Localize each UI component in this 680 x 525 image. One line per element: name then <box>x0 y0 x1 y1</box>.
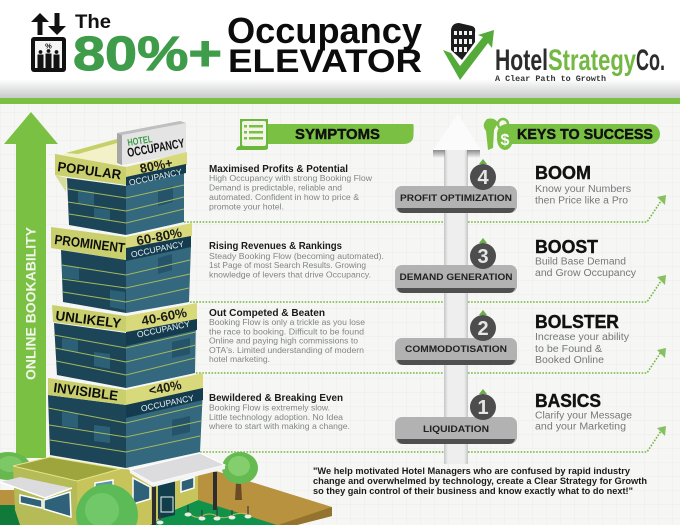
key: basics <box>535 391 632 432</box>
title <box>73 10 422 81</box>
arrow: online bookability: ONLINE BOOKABILITY <box>22 226 38 380</box>
key: boom <box>535 163 631 206</box>
key: basics: BASICS <box>535 391 601 411</box>
symptom: bewildered: Booking Flow is extremely slow. <box>209 402 330 412</box>
symptom: maximised profits: promote your hotel. <box>209 202 284 212</box>
icon: keys <box>484 118 513 150</box>
tree: right <box>222 452 258 500</box>
key: boom: BOOM <box>535 163 591 183</box>
symptom: out competed: Online and paying high commissions to <box>209 336 358 346</box>
step 2: commodotisation: 2 <box>477 318 489 340</box>
rooftop <box>60 139 126 168</box>
quote: "We help motivated Hotel Managers who are confused by rapid industry <box>313 466 630 476</box>
icon: scroll list <box>236 119 268 150</box>
floor section: prominent: 60-80% <box>135 225 184 248</box>
step 2: commodotisation: COMMODOTISATION <box>405 344 507 355</box>
logo: Hotel Strategy Co: A Clear Path to Growth <box>495 75 606 84</box>
symptom: out competed: hotel marketing. <box>209 354 270 364</box>
step 1: liquidation: 1 <box>477 397 489 419</box>
symptom: rising revenues <box>209 241 384 280</box>
symptom: bewildered: Bewildered & Breaking Even <box>209 393 343 404</box>
floor section: prominent <box>51 223 192 313</box>
key: bolster <box>535 312 629 366</box>
title: ELEVATOR <box>228 43 422 79</box>
symptom: bewildered: Little technology adoption. No Idea <box>209 412 343 422</box>
step 2: commodotisation <box>395 310 517 365</box>
symptom: out competed: OTA's. Limited understanding of modern <box>209 345 364 355</box>
symptom: rising revenues: 1st Page of most Search Results. Growing <box>209 260 366 270</box>
key: boost <box>535 237 636 279</box>
entrance with door and windows <box>130 453 225 525</box>
building tower <box>48 121 203 468</box>
title: The <box>75 11 111 33</box>
floor section: invisible: OCCUPANCY <box>140 392 195 414</box>
sign: hotel occupancy: HOTEL <box>127 134 153 149</box>
header: symptoms: SYMPTOMS <box>295 127 380 143</box>
step 4: profit optimization <box>395 159 517 213</box>
symptom: bewildered: where to start with making a change. <box>208 421 350 431</box>
step 3: demand generation: 3 <box>477 246 489 268</box>
quote: so they gain control of their business and know exactly what to do next!" <box>313 486 633 496</box>
logo: Hotel Strategy Co <box>443 23 665 84</box>
step 3: demand generation: DEMAND GENERATION <box>400 272 513 283</box>
floor section: invisible <box>48 373 203 468</box>
step 4: profit optimization: PROFIT OPTIMIZATION <box>400 193 512 204</box>
floor section: unlikely: UNLIKELY <box>55 308 122 331</box>
symptom: rising revenues: Steady Booking Flow (becoming automated). <box>209 251 384 261</box>
stanchions and rope <box>156 505 252 524</box>
key: basics: and your Marketing <box>535 422 626 432</box>
logo: Hotel Strategy Co: Strategy <box>548 44 636 77</box>
low-rise lobby building <box>0 453 252 525</box>
symptom: maximised profits: High Occupancy with strong Booking Flow <box>209 173 373 183</box>
left awning and windows <box>0 477 72 517</box>
floor section: prominent: PROMINENT <box>54 232 127 256</box>
symptom: out competed: Out Competed & Beaten <box>209 308 325 319</box>
sign: hotel occupancy <box>117 121 186 165</box>
floor section: unlikely: 40-60% <box>140 305 189 328</box>
header: symptoms <box>236 119 414 150</box>
floor section: popular: OCCUPANCY <box>128 166 183 188</box>
ground: dirt and lawn <box>0 471 332 525</box>
key: boost: and Grow Occupancy <box>535 268 636 279</box>
floor section: popular <box>55 152 187 235</box>
symptom: rising revenues: Rising Revenues & Rankings <box>209 241 342 252</box>
sign: hotel occupancy: OCCUPANCY <box>126 136 186 160</box>
symptom: out competed <box>209 308 365 364</box>
key: boom: then Price like a Pro <box>535 196 628 206</box>
floor section: prominent: OCCUPANCY <box>130 238 185 260</box>
key: boost: Build Base Demand <box>535 256 626 268</box>
step 1: liquidation <box>395 389 517 444</box>
symptom: out competed: Booking Flow is only a trickle as you lose <box>209 317 365 327</box>
symptom: bewildered <box>208 393 350 431</box>
key: basics: Clarify your Message <box>535 410 632 422</box>
quote <box>313 466 647 496</box>
header band <box>0 0 680 104</box>
floor section: invisible: <40% <box>148 377 183 398</box>
key: boom: Know your Numbers <box>535 184 631 195</box>
quote: change and overwhelmed by technology, create a Clear Strategy for Growth <box>313 476 647 486</box>
icon: keys: $ <box>501 132 510 149</box>
tree: left <box>0 452 30 480</box>
arrow: central elevator shaft <box>433 114 481 464</box>
logo: Hotel Strategy Co: Hotel <box>495 44 548 77</box>
floor section: popular: POPULAR <box>57 159 122 182</box>
symptom: rising revenues: knowledge of levers that drive Occupancy. <box>209 270 371 280</box>
step 3: demand generation <box>395 238 517 293</box>
symptom: maximised profits: automated. Confident in how to price & <box>209 192 359 202</box>
floor section: unlikely <box>52 303 197 388</box>
back window <box>95 480 113 488</box>
symptom: maximised profits: Maximised Profits & Potential <box>209 164 348 175</box>
icon: elevator with people <box>31 13 66 72</box>
step 1: liquidation: LIQUIDATION <box>423 424 489 435</box>
floor section: invisible: INVISIBLE <box>53 380 119 403</box>
title: 80%+ <box>73 28 222 81</box>
key: bolster: Booked Online <box>535 355 604 366</box>
arrow: online bookability <box>4 112 58 458</box>
floor section: popular: 80%+ <box>139 155 174 176</box>
symptom: out competed: the race to booking. Difficult to be found <box>209 326 364 336</box>
tree: front <box>76 484 138 525</box>
key: bolster: Increase your ability <box>535 332 629 343</box>
step 4: profit optimization: 4 <box>477 167 489 189</box>
symptom: maximised profits: Demand is predictable, reliable and <box>209 182 342 192</box>
key: bolster: BOLSTER <box>535 312 619 332</box>
title: Occupancy <box>227 10 422 51</box>
header: keys to success: KEYS TO SUCCESS <box>517 127 653 143</box>
header: keys to success <box>484 118 660 150</box>
dotted dividers with arrows <box>184 195 666 452</box>
floor section: unlikely: OCCUPANCY <box>136 318 191 340</box>
icon: elevator with people: % <box>45 42 52 50</box>
symptom: maximised profits <box>209 164 373 212</box>
icon: logo building and check <box>443 23 494 80</box>
key: bolster: to be Found & <box>535 344 602 355</box>
key: boost: BOOST <box>535 237 598 257</box>
